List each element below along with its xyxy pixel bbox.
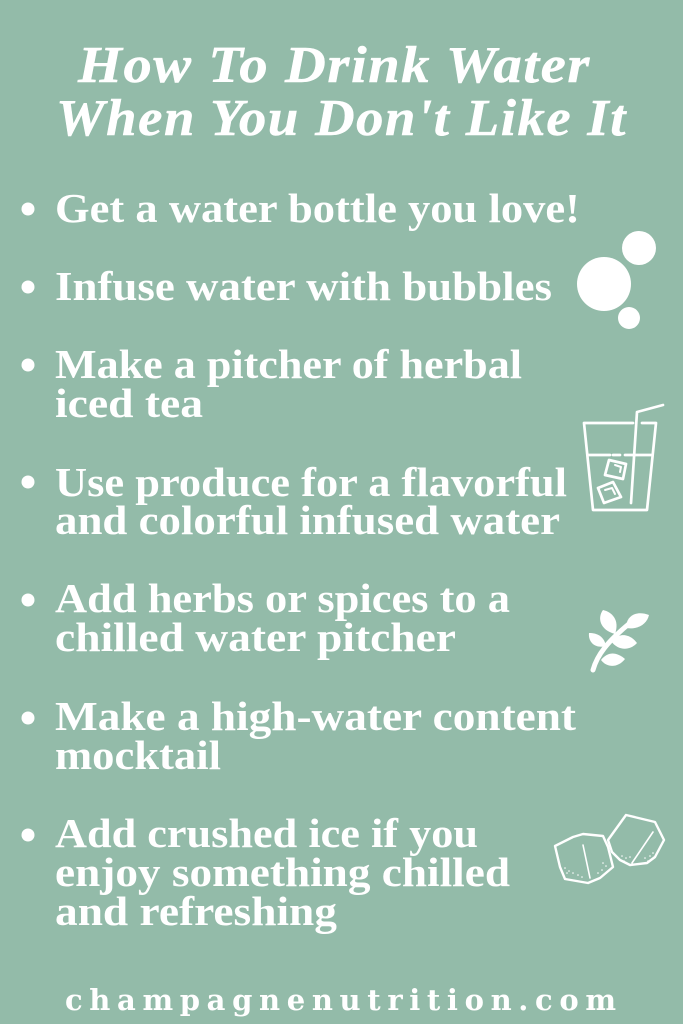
tip: crushed ice: enjoy something chilled — [55, 849, 510, 895]
tip: water bottle: Get a water bottle you love! — [55, 185, 580, 231]
tip: crushed ice: Add crushed ice if you — [55, 810, 478, 856]
tip: mocktail: mocktail — [55, 732, 221, 778]
tip: mocktail: Make a high-water content — [55, 693, 576, 739]
tip: herbs or spices — [22, 575, 510, 660]
tip: crushed ice — [22, 810, 510, 934]
title — [56, 37, 627, 147]
title: How To Drink Water — [77, 37, 591, 94]
tip: herbs or spices: chilled water pitcher — [55, 614, 456, 660]
icon: ice cubes — [555, 815, 664, 883]
tip: herbs or spices: Add herbs or spices to a — [55, 575, 510, 621]
icon: iced drink glass — [584, 405, 663, 510]
tip: produce infused water — [22, 459, 567, 543]
tip: herbal iced tea: iced tea — [55, 380, 203, 426]
tip: produce infused water: Use produce for a flavorful — [55, 459, 567, 505]
icon: herb sprig — [589, 610, 649, 670]
icon: bubbles — [577, 231, 656, 329]
tip: produce infused water: and colorful infused water — [55, 497, 560, 543]
footer website: champagnenutrition.com — [65, 983, 616, 1017]
tip: crushed ice: and refreshing — [55, 888, 338, 934]
tip: herbal iced tea — [22, 341, 522, 426]
tip: herbal iced tea: Make a pitcher of herbal — [55, 341, 522, 387]
title: When You Don't Like It — [56, 90, 627, 147]
tip: mocktail — [22, 693, 576, 778]
tip: bubbles: Infuse water with bubbles — [55, 263, 552, 309]
